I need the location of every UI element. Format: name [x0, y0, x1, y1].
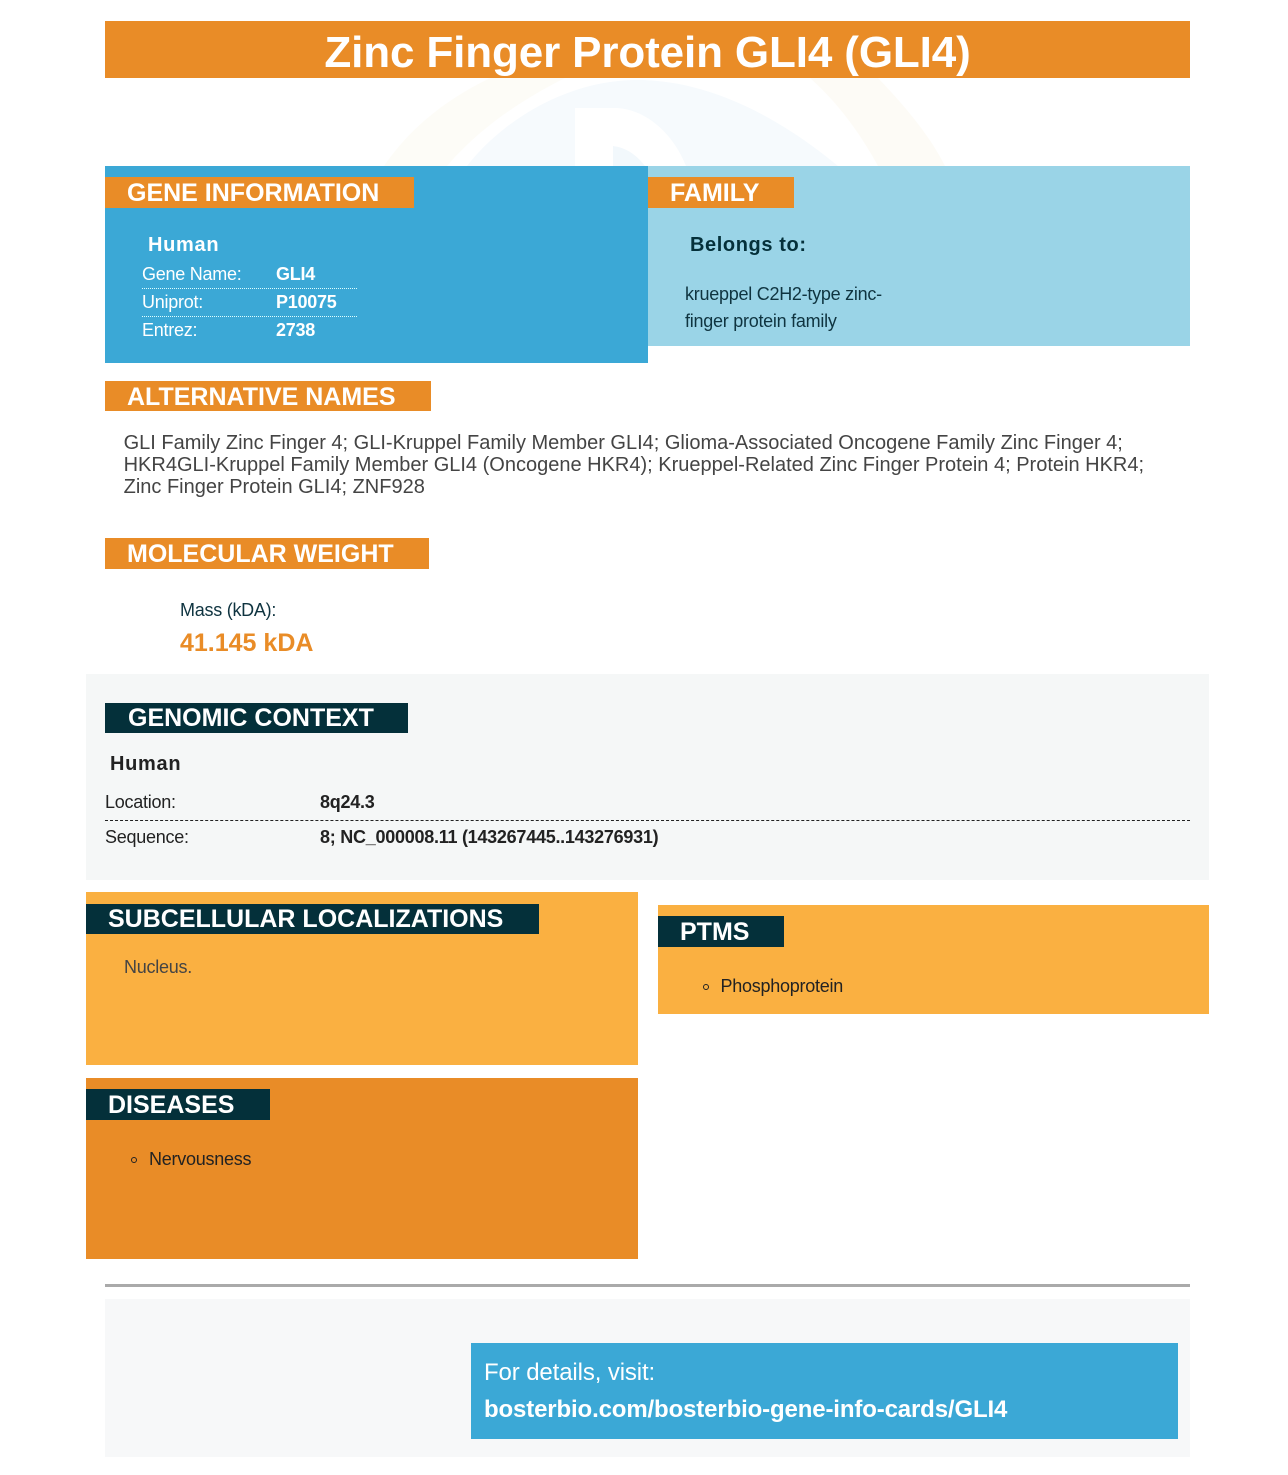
panel: gene information	[105, 166, 648, 363]
callout url: bosterbio.com/bosterbio-gene-info-cards/GLI4	[484, 1396, 1007, 1423]
heading: gene information: GENE INFORMATION	[127, 179, 379, 207]
location row: 8q24.3	[320, 792, 374, 812]
title	[105, 21, 1190, 78]
mass value: 41.145 kDA	[180, 629, 313, 657]
alternative names text: Zinc Finger Protein GLI4; ZNF928	[124, 476, 425, 498]
sequence row: Sequence:	[105, 827, 189, 847]
heading: alternative names: ALTERNATIVE NAMES	[127, 383, 396, 411]
alternative names text: HKR4GLI-Kruppel Family Member GLI4 (Oncogene HKR4); Krueppel-Related Zinc Finger Protein 4; Protein HKR4;	[124, 454, 1144, 476]
gene name row: GLI4	[276, 264, 315, 284]
heading: genomic context: GENOMIC CONTEXT	[128, 704, 374, 732]
subheading: belongs to: Belongs to:	[690, 234, 807, 256]
panel: genomic context	[86, 674, 1209, 880]
uniprot row	[142, 291, 357, 317]
panel: family	[648, 166, 1190, 346]
panel: diseases	[86, 1078, 638, 1259]
ptm list item: Phosphoprotein	[720, 976, 843, 996]
heading: diseases	[86, 1089, 270, 1120]
title: Zinc Finger Protein GLI4 (GLI4)	[324, 28, 971, 77]
location row	[105, 791, 1190, 821]
family text: finger protein family	[685, 311, 837, 331]
sequence row	[105, 827, 658, 847]
subheading: human: Human	[148, 234, 219, 256]
disease list item: Nervousness	[149, 1149, 251, 1169]
alternative names text: GLI Family Zinc Finger 4; GLI-Kruppel Family Member GLI4; Glioma-Associated Oncogene Family Zinc Finger 4;	[124, 432, 1123, 454]
callout label: For details, visit:	[484, 1359, 655, 1386]
entrez row	[142, 320, 315, 340]
entrez row: 2738	[276, 320, 315, 340]
panel: ptms	[658, 905, 1209, 1014]
panel: footer	[105, 1299, 1190, 1457]
divider	[105, 1284, 1190, 1287]
gene name row: Gene Name:	[142, 264, 241, 284]
sequence row: 8; NC_000008.11 (143267445..143276931)	[320, 827, 658, 847]
panel: subcellular localizations	[86, 892, 638, 1065]
alternative names text	[124, 432, 1144, 498]
heading: ptms	[658, 916, 784, 947]
watermark logo	[468, 78, 944, 166]
heading: family	[648, 177, 794, 208]
heading: family: FAMILY	[670, 179, 759, 207]
localization text: Nucleus.	[124, 957, 192, 977]
mass label: Mass (kDA):	[180, 600, 276, 620]
gene name row	[142, 263, 357, 289]
uniprot row: P10075	[276, 292, 336, 312]
family text	[685, 284, 882, 331]
family text: krueppel C2H2-type zinc-	[685, 284, 882, 304]
heading: subcellular localizations: SUBCELLULAR LOCALIZATIONS	[108, 905, 503, 933]
heading: molecular weight: MOLECULAR WEIGHT	[127, 540, 394, 568]
entrez row: Entrez:	[142, 320, 197, 340]
heading: diseases: DISEASES	[108, 1091, 234, 1119]
heading: ptms: PTMS	[680, 918, 749, 946]
subheading: human: Human	[110, 753, 181, 775]
location row: Location:	[105, 792, 176, 812]
uniprot row: Uniprot:	[142, 292, 203, 312]
callout: details link	[471, 1343, 1178, 1439]
